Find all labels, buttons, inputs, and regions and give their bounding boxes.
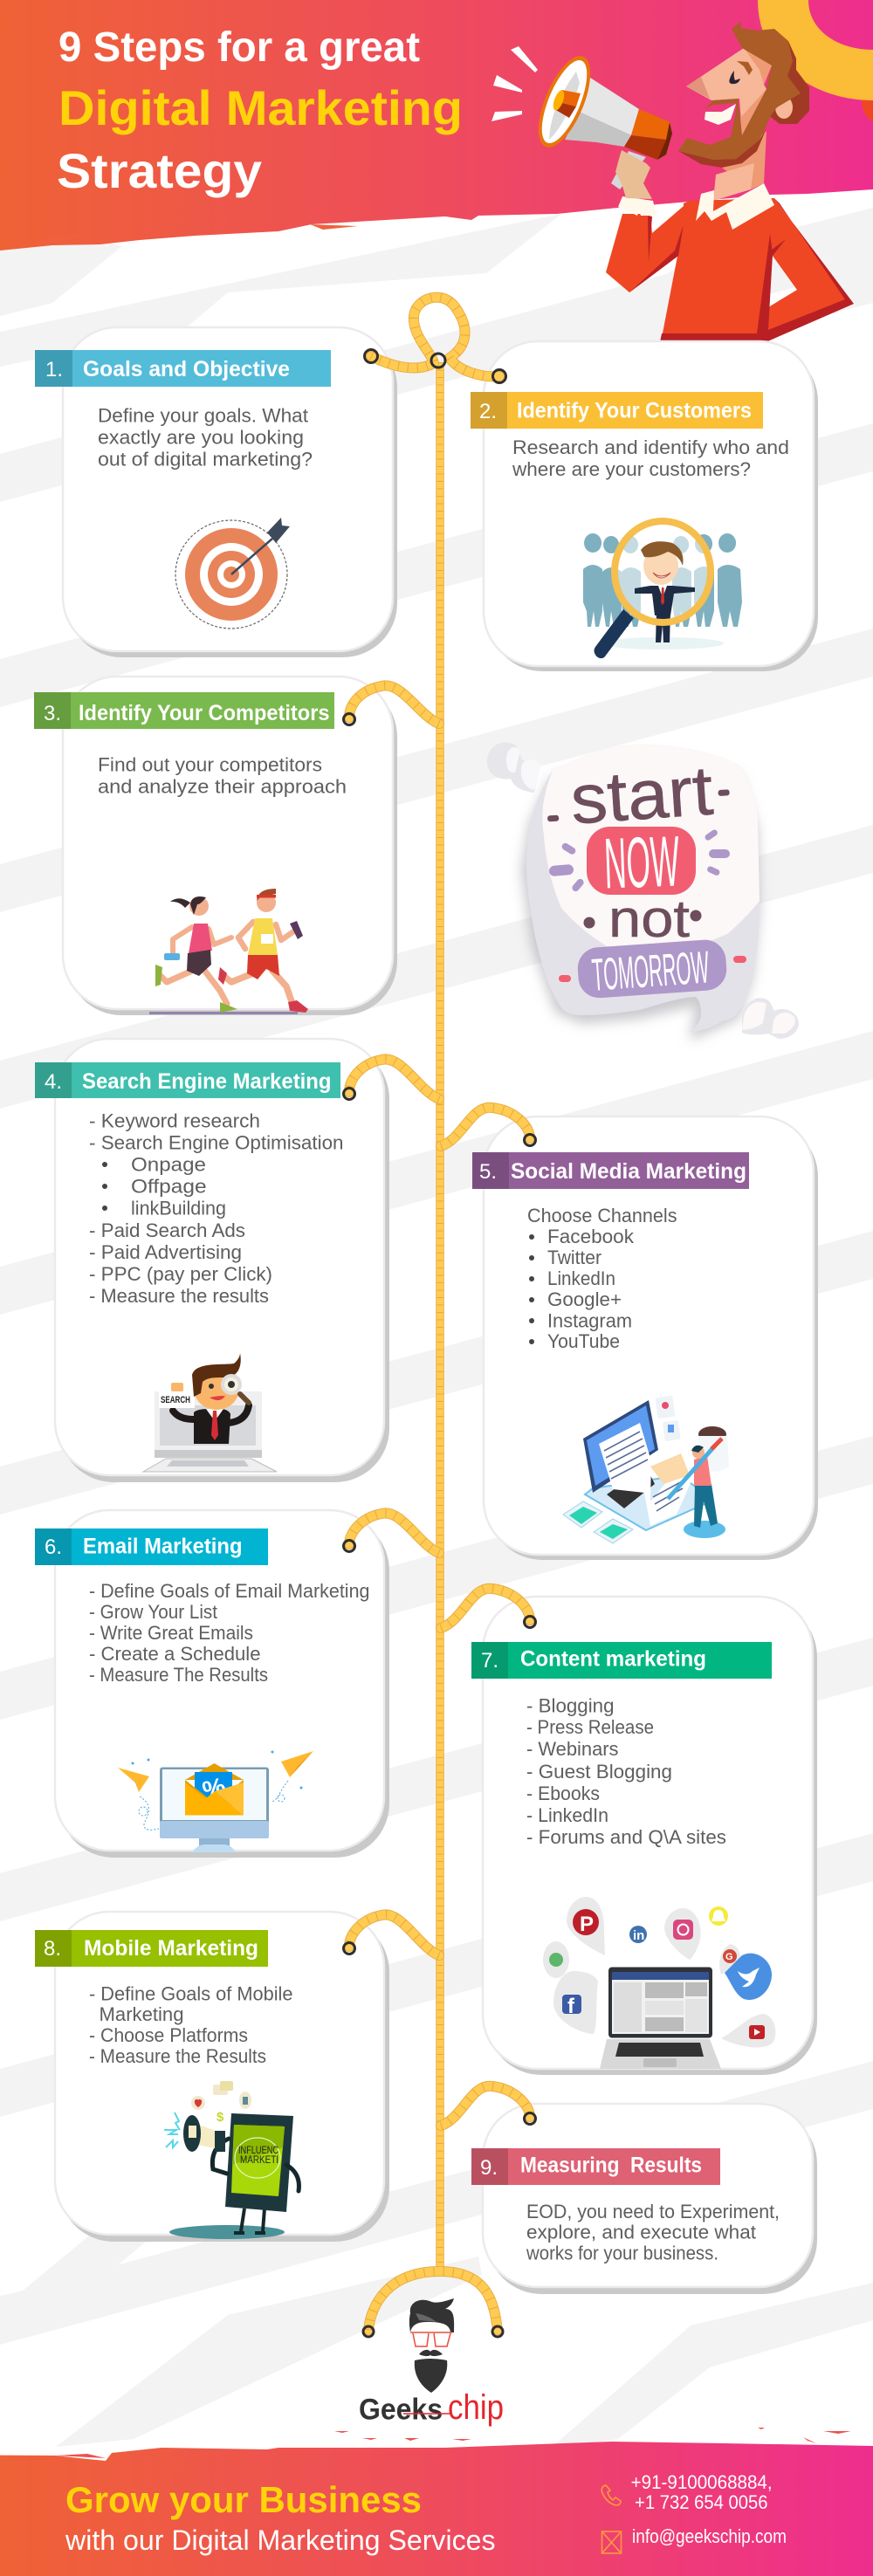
heading: email marketing: [35, 1528, 268, 1565]
panel: step 7 content marketing: [471, 1597, 817, 2075]
top rope loop: [365, 298, 506, 382]
icon: man with megaphone: [491, 21, 854, 342]
icon: phone with megaphone: MARKETI: [240, 2154, 278, 2166]
text block: measuring: works for your business.: [526, 2243, 718, 2264]
connector rope step 4: [344, 1059, 439, 1100]
phone numbers: +1 732 654 0056: [635, 2491, 768, 2513]
text block: measuring: [526, 2201, 780, 2264]
text block: email list: - Create a Schedule: [89, 1643, 260, 1665]
text block: search engine list: - Search Engine Optimisation: [89, 1131, 343, 1153]
icon: two runners: [155, 889, 308, 1013]
text block: search engine list: - Keyword research: [89, 1109, 260, 1131]
cuff: [618, 196, 656, 216]
text block: search engine list: - Paid Search Ads: [89, 1219, 245, 1241]
connector rope step 5: [441, 1108, 536, 1146]
text block: social channels: LinkedIn: [547, 1267, 615, 1289]
footer banner: [0, 2428, 873, 2576]
text block: mobile list: - Measure the Results: [89, 2045, 266, 2067]
hair: [732, 21, 801, 115]
text: not: [583, 890, 702, 948]
bubble shadow: [521, 753, 760, 1041]
heading: content marketing: [471, 1642, 772, 1679]
text block: search engine list: - Measure the results: [89, 1285, 269, 1307]
panel: step 8 mobile marketing: [35, 1912, 389, 2242]
mouth: [705, 104, 736, 125]
icon: search man in laptop: SEARCH: [161, 1395, 190, 1405]
text block: search engine list: [89, 1109, 343, 1307]
yellow ring decoration: [758, 0, 873, 100]
heading: content marketing: 7.: [481, 1649, 498, 1673]
heading: social media marketing: 5.: [479, 1160, 497, 1184]
panel: step 2 identify your customers: [471, 341, 818, 671]
panel: step 9 measuring results: [471, 2104, 817, 2294]
text block: search engine list: - Paid Advertising: [89, 1241, 242, 1263]
title: [57, 24, 463, 198]
logo wordmark: Geeks: [359, 2394, 443, 2427]
heading: search engine marketing: 4.: [45, 1070, 62, 1094]
heading: measuring results: 9.: [480, 2156, 498, 2180]
text block: social channels: Instagram: [547, 1309, 632, 1332]
heading: search engine marketing: Search Engine Marketing: [82, 1069, 332, 1094]
logo: geekschip: [359, 2298, 504, 2427]
icon: search man in laptop: [143, 1353, 277, 1472]
panel: step 4 search engine marketing: [35, 1039, 389, 1482]
footer headline: with our Digital Marketing Services: [65, 2524, 496, 2556]
icon: target with arrow: [175, 518, 290, 629]
icon: content writing laptop and person: [563, 1396, 729, 1543]
back hair: [766, 41, 809, 124]
text block: search engine list: - PPC (pay per Click): [89, 1263, 272, 1285]
man runner: [218, 889, 308, 1013]
text block: social channels: Facebook: [547, 1226, 635, 1247]
heading: identify your customers: [471, 392, 763, 429]
email address: info@geekschip.com: [632, 2525, 787, 2547]
text block: content list: [526, 1695, 726, 1848]
connector rope step 3: [344, 685, 439, 725]
text block: content list: - Guest Blogging: [526, 1761, 672, 1783]
text block: content list: - Blogging: [526, 1695, 615, 1717]
heading: identify your competitors: [34, 692, 334, 729]
connector rope step 8: [344, 1914, 439, 1955]
sweater: [661, 198, 853, 342]
beard: [678, 128, 766, 168]
brush splatters: [35, 224, 358, 244]
icon: magnifier over crowd: [583, 521, 742, 658]
text block: customers: [512, 436, 789, 480]
text block: search engine list: Onpage: [131, 1153, 206, 1175]
heading: social media marketing: Social Media Marketing: [511, 1159, 746, 1184]
heading: goals and objective: [35, 350, 331, 387]
heading: goals and objective: Goals and Objective: [83, 357, 290, 381]
pink accents: [559, 956, 746, 982]
rope timeline: [344, 298, 536, 2337]
badge: now: NOW: [603, 822, 681, 903]
icon: social network laptop: G: [725, 1952, 733, 1962]
icon: phone with megaphone: [164, 2081, 299, 2239]
face: [686, 48, 772, 135]
panel: step 6 email marketing: [35, 1510, 389, 1858]
text block: search engine list: linkBuilding: [131, 1197, 226, 1219]
panel: start now not tomorrow speech bubble: TOMORROW: [590, 942, 711, 1001]
heading: identify your competitors: 3.: [44, 702, 61, 725]
heading: measuring results: Measuring Results: [520, 2153, 702, 2177]
text block: competitors: [98, 754, 347, 798]
panel: step 1 goals and objective: [35, 327, 397, 657]
badge: now: [587, 822, 696, 903]
icon: phone with megaphone: $: [217, 2110, 224, 2125]
text block: email list: - Grow Your List: [89, 1601, 217, 1623]
icon: social network laptop: in: [633, 1928, 644, 1943]
central vertical rope: [436, 362, 444, 2271]
megaphone: [576, 76, 639, 135]
icon: social network laptop: P: [580, 1913, 594, 1936]
text block: social channels: Google+: [547, 1288, 622, 1310]
heading: mobile marketing: Mobile Marketing: [84, 1936, 258, 1961]
text block: social channels: [527, 1205, 677, 1352]
text block: email list: - Write Great Emails: [89, 1622, 253, 1644]
heading: content marketing: Content marketing: [520, 1646, 706, 1671]
text block: competitors: Find out your competitors: [98, 754, 322, 775]
ear: [775, 96, 793, 119]
text block: mobile list: - Define Goals of Mobile: [89, 1983, 293, 2004]
logo wordmark: [359, 2388, 504, 2427]
text block: mobile list: [89, 1983, 293, 2067]
sound rays: [491, 46, 538, 121]
text block: goals: [98, 405, 313, 470]
text block: measuring: explore, and execute what: [526, 2222, 756, 2243]
icon: email on monitor with paper planes: [118, 1751, 313, 1852]
text block: email list: - Define Goals of Email Marketing: [89, 1580, 370, 1602]
connector rope step 9: [441, 2086, 536, 2126]
icon: social network laptop: f: [567, 1995, 575, 2018]
text block: social channels: Choose Channels: [527, 1205, 677, 1226]
heading: identify your customers: Identify Your Customers: [517, 398, 752, 422]
icon: bearded geek face: [409, 2298, 454, 2393]
heading: mobile marketing: [35, 1930, 268, 1967]
connector rope step 7: [441, 1589, 536, 1628]
text: start: start: [568, 752, 715, 839]
logo wordmark: chip: [448, 2388, 504, 2427]
collar: [696, 183, 774, 230]
icon: mail: [602, 2531, 622, 2553]
header gradient background with brush edge: [0, 0, 873, 251]
panel: step 3 identify your competitors: [34, 677, 397, 1015]
icon: social network laptop: [543, 1897, 775, 2069]
thumb decorations: [487, 742, 540, 793]
phone numbers: [631, 2471, 773, 2513]
heading: identify your competitors: Identify Your Competitors: [79, 701, 330, 725]
text block: customers: where are your customers?: [512, 458, 751, 480]
panel: start now not tomorrow speech bubble: [487, 742, 799, 1041]
neck: [722, 131, 766, 189]
brush splatters: [56, 2428, 851, 2458]
text block: content list: - Webinars: [526, 1738, 618, 1760]
text block: mobile list: Marketing: [100, 2003, 183, 2025]
heading: email marketing: 6.: [45, 1535, 62, 1559]
footer gradient with brush edge: [0, 2442, 873, 2576]
text block: content list: - Ebooks: [526, 1783, 600, 1804]
footer headline: [65, 2479, 496, 2556]
woman runner: [155, 896, 237, 1013]
text block: mobile list: - Choose Platforms: [89, 2024, 248, 2046]
panel: step 5 social media marketing: [472, 1116, 818, 1560]
header banner: [0, 0, 873, 342]
heading: mobile marketing: 8.: [44, 1937, 61, 1961]
text block: competitors: and analyze their approach: [98, 775, 347, 798]
heading: measuring results: [471, 2148, 720, 2185]
bubble body: [526, 745, 760, 1032]
text block: goals: out of digital marketing?: [98, 449, 313, 470]
phone numbers: +91-9100068884,: [631, 2471, 773, 2493]
icon: email on monitor with paper planes: %: [200, 1772, 229, 1804]
title: 9 Steps for a great: [58, 24, 420, 71]
text block: measuring: EOD, you need to Experiment,: [526, 2201, 780, 2222]
eye: [729, 71, 740, 84]
text block: goals: exactly are you looking: [98, 426, 304, 449]
purple accent dashes: [549, 828, 730, 893]
megaphone handle and hand: [611, 151, 646, 189]
text block: goals: Define your goals. What: [98, 405, 308, 426]
heading: search engine marketing: [35, 1062, 340, 1098]
text block: content list: - LinkedIn: [526, 1804, 608, 1826]
icon: phone with megaphone: INFLUENC: [238, 2144, 278, 2156]
text block: content list: - Press Release: [526, 1716, 654, 1738]
footer headline: Grow your Business: [65, 2479, 422, 2520]
heading: goals and objective: 1.: [45, 358, 63, 381]
text block: social channels: Twitter: [547, 1247, 601, 1268]
heading: identify your customers: 2.: [479, 400, 497, 423]
connector rope step 6: [344, 1513, 439, 1553]
icon: phone: [601, 2485, 621, 2505]
text block: social channels: YouTube: [547, 1330, 620, 1352]
text block: customers: Research and identify who and: [512, 436, 789, 458]
badge: tomorrow: [576, 938, 728, 1002]
heading: email marketing: Email Marketing: [83, 1535, 243, 1559]
heading: social media marketing: [472, 1152, 749, 1189]
text block: search engine list: Offpage: [131, 1175, 207, 1197]
text block: email list: - Measure The Results: [89, 1664, 268, 1686]
text block: content list: - Forums and Q\A sites: [526, 1826, 726, 1848]
bottom rope arch: [363, 2271, 503, 2337]
text block: email list: [89, 1580, 370, 1686]
title: Strategy: [57, 143, 262, 198]
text: not: not: [608, 890, 690, 948]
title: Digital Marketing: [58, 80, 463, 135]
